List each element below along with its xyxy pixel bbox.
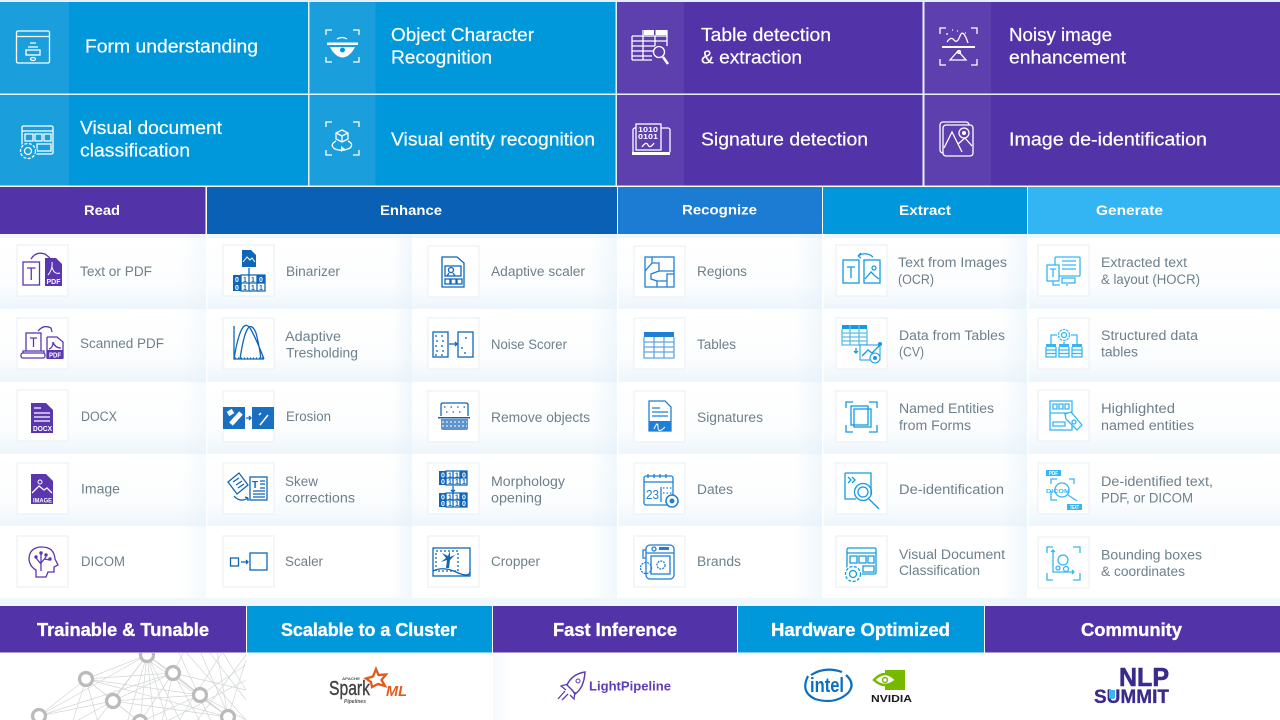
item: Cropper xyxy=(428,536,540,587)
logo: NVIDIA: NVIDIA xyxy=(871,694,912,705)
item: Bounding boxes and coordinates: Bounding boxes xyxy=(1101,548,1202,562)
icon: scanner to PDF xyxy=(17,318,68,369)
item: Adaptive Tresholding: Adaptive xyxy=(285,329,341,344)
item: Signatures xyxy=(634,391,763,442)
logo: NVIDIA xyxy=(871,670,912,705)
item: Remove objects: Remove objects xyxy=(491,410,590,425)
tile: Visual document classification xyxy=(0,95,308,186)
column: Enhance, second group xyxy=(428,246,590,587)
icon: binarizer grid: 1 xyxy=(259,285,263,292)
logo: NLP Summit: NLP xyxy=(1119,662,1169,692)
panel: Scalable to a Cluster xyxy=(247,606,492,705)
logo: Spark ML Pipelines xyxy=(329,669,407,705)
icon: signature tablet xyxy=(632,124,670,155)
icon: de-identified scan: TEXT xyxy=(1070,505,1079,511)
item: De-identification xyxy=(836,463,1004,514)
icon: signature tablet: 0101 xyxy=(638,134,658,141)
logo: LightPipeline xyxy=(558,672,671,700)
icon: de-identified scan: DICOM xyxy=(1046,489,1070,495)
heading: Community: Community xyxy=(1081,620,1182,640)
logo: Spark ML Pipelines: APACHE xyxy=(342,676,360,681)
item: Text or PDF: Text or PDF xyxy=(80,264,152,279)
item: Visual Document Classification xyxy=(836,536,1005,587)
icon: image file: IMAGE xyxy=(33,498,52,504)
item: De-identified text, PDF, or DICOM: De-identified text, xyxy=(1101,474,1213,489)
item: Cropper: Cropper xyxy=(491,554,540,569)
icon: morphology grids xyxy=(428,463,479,514)
icon: scanner to PDF: PDF xyxy=(49,352,62,360)
icon: noisy image xyxy=(940,28,977,65)
icon: morphology grids: 1 xyxy=(448,501,452,508)
item: Dates xyxy=(634,463,733,514)
logo: Intel xyxy=(805,670,852,701)
item: Skew corrections xyxy=(223,463,355,514)
item: Extracted text and layout (HOCR): & layout (HOCR) xyxy=(1101,272,1200,287)
icon: magnifier over document xyxy=(836,463,887,514)
item: Adaptive scaler: Adaptive scaler xyxy=(491,264,585,279)
item: Morphology opening: Morphology xyxy=(491,474,565,489)
item: Highlighted named entities xyxy=(1038,390,1194,441)
item: Text from Images (OCR) xyxy=(836,245,1007,296)
icon: table magnifier xyxy=(632,30,668,64)
panel: capability tiles xyxy=(0,0,1280,186)
item: Data from Tables (CV) xyxy=(836,318,1005,369)
item: Visual Document Classification: Classification xyxy=(899,563,980,578)
icon: binarizer grid: 0 xyxy=(259,277,263,284)
item: DICOM: DICOM xyxy=(81,554,125,569)
item: Scanned PDF: Scanned PDF xyxy=(80,336,164,351)
item: Data from Tables (CV): Data from Tables xyxy=(899,328,1005,343)
icon: morphology grids: 1 xyxy=(448,494,452,502)
tile: Form understanding: Form understanding xyxy=(85,36,258,56)
icon: histogram curves xyxy=(223,318,274,369)
icon: eye scan xyxy=(326,30,359,62)
item: Text from Images (OCR): Text from Images xyxy=(898,255,1007,270)
item: Named Entities from Forms: from Forms xyxy=(899,418,971,433)
item: De-identification: De-identification xyxy=(899,482,1004,497)
panel: table shading xyxy=(0,234,1280,606)
item: Binarizer xyxy=(223,245,340,296)
tile: Visual document classification: Visual document xyxy=(80,118,222,138)
item: Visual Document Classification: Visual Document xyxy=(899,547,1005,562)
column: Extract xyxy=(836,245,1007,587)
item: De-identified text, PDF, or DICOM xyxy=(1038,463,1213,514)
item: Brands: Brands xyxy=(697,554,741,569)
item: Bounding boxes and coordinates xyxy=(1038,537,1202,588)
icon: morphology grids: 1 xyxy=(462,479,466,486)
item: Named Entities from Forms xyxy=(836,391,994,442)
tile: Noisy image enhancement xyxy=(924,2,1280,94)
panel: Trainable and Tunable xyxy=(0,606,246,720)
icon: binarizer grid: 1 xyxy=(243,277,247,284)
icon: text to PDF: PDF xyxy=(46,279,61,286)
item: Extracted text and layout (HOCR) xyxy=(1038,245,1200,296)
heading: Scalable to a Cluster: Scalable to a Cluster xyxy=(281,620,457,640)
network graph xyxy=(30,653,246,720)
item: Text or PDF xyxy=(17,245,152,296)
tile: Image de-identification xyxy=(924,95,1280,186)
icon: de-identified scan xyxy=(1038,463,1089,514)
icon: signed document xyxy=(634,391,685,442)
item: DOCX xyxy=(17,390,117,441)
header: Generate xyxy=(1028,187,1280,234)
logo: LightPipeline: LightPipeline xyxy=(589,680,671,694)
item: Structured data tables xyxy=(1038,318,1199,369)
logo: NLP Summit xyxy=(1094,662,1169,708)
panel: Hardware Optimized xyxy=(738,606,984,705)
icon: bounding box axes xyxy=(1038,537,1089,588)
icon: image with eye xyxy=(940,122,973,156)
item: Remove objects xyxy=(428,391,590,442)
item: Named Entities from Forms: Named Entities xyxy=(899,401,994,416)
tile: Form understanding xyxy=(0,2,308,94)
icon: morphology grids: 1 xyxy=(455,494,459,502)
icon: morphology grids: 0 xyxy=(462,472,466,480)
item: Signatures: Signatures xyxy=(697,410,763,425)
icon: noise documents xyxy=(428,318,479,369)
icon: morphology grids: 1 xyxy=(455,472,459,480)
item: Image xyxy=(17,463,120,514)
icon: classification window xyxy=(836,536,887,587)
icon: morphology grids: 0 xyxy=(441,494,445,502)
icon: document classification xyxy=(19,126,53,160)
icon: binarizer grid: 1 xyxy=(243,285,247,292)
tile: Object Character Recognition: Recognition xyxy=(391,48,492,68)
icon: data from tables xyxy=(836,318,887,369)
header: Read: Read xyxy=(84,202,120,218)
tile: Object Character Recognition: Object Character xyxy=(391,25,534,45)
item: Noise Scorer: Noise Scorer xyxy=(491,337,567,352)
icon: morphology grids: 1 xyxy=(448,479,452,486)
icon: binarizer grid: 0 xyxy=(235,285,239,292)
item: Highlighted named entities: named entities xyxy=(1101,418,1194,433)
item: Adaptive Tresholding xyxy=(223,318,358,369)
header: Recognize xyxy=(618,187,822,234)
item: Image: Image xyxy=(81,482,120,496)
logo: Spark ML Pipelines: Spark xyxy=(329,678,371,700)
icon: table xyxy=(634,318,685,369)
item: Tables xyxy=(634,318,736,369)
heading: Trainable and Tunable: Trainable & Tunable xyxy=(37,620,209,640)
tile: Table detection and extraction: & extraction xyxy=(701,48,802,68)
tile: Signature detection xyxy=(617,95,922,186)
item: Text from Images (OCR): (OCR) xyxy=(898,272,934,287)
logo: Spark ML Pipelines: ML xyxy=(386,683,407,700)
item: Dates: Dates xyxy=(697,482,733,497)
item: Scanned PDF xyxy=(17,318,164,369)
icon: brand device xyxy=(634,536,685,587)
icon: form xyxy=(16,31,50,63)
item: Erosion xyxy=(223,391,331,442)
icon: binarizer grid xyxy=(223,245,274,296)
column: Recognize xyxy=(634,246,763,587)
item: Adaptive scaler xyxy=(428,246,585,297)
header: Read xyxy=(0,187,206,234)
icon: morphology grids: 0 xyxy=(462,494,466,502)
item: Adaptive Tresholding: Tresholding xyxy=(286,346,358,360)
column: Enhance, first group xyxy=(223,245,358,587)
item: Scaler xyxy=(223,536,324,587)
item: Structured data tables: tables xyxy=(1101,344,1138,360)
logo: Intel: intel xyxy=(810,675,844,697)
header: Generate: Generate xyxy=(1096,202,1163,218)
item: Morphology opening xyxy=(428,463,565,514)
panel: Fast Inference xyxy=(493,606,737,720)
icon: de-identified scan: PDF xyxy=(1049,471,1058,477)
item: Noise Scorer xyxy=(428,318,567,369)
item: Binarizer: Binarizer xyxy=(286,264,340,279)
column: Generate xyxy=(1038,245,1213,588)
icon: calendar: 23 xyxy=(646,487,659,502)
panel: Community xyxy=(985,606,1280,708)
tile: Signature detection: Signature detection xyxy=(701,130,868,150)
tile: Table detection and extraction: Table detection xyxy=(701,25,831,45)
item: Skew corrections: Skew xyxy=(285,474,318,489)
heading: Fast Inference: Fast Inference xyxy=(553,620,677,640)
icon: morphology grids: 1 xyxy=(455,501,459,508)
icon: binarizer grid: 1 xyxy=(251,285,255,292)
icon: cube scan xyxy=(326,122,359,155)
item: Highlighted named entities: Highlighted xyxy=(1101,401,1175,416)
item: Morphology opening: opening xyxy=(491,490,542,506)
icon: DOCX file: DOCX xyxy=(33,426,52,433)
header: Recognize: Recognize xyxy=(682,202,757,218)
tile: Visual document classification: classification xyxy=(80,140,190,160)
item: Regions xyxy=(634,246,747,297)
icon: binarizer grid: 1 xyxy=(251,277,255,284)
icon: morphology grids: 0 xyxy=(462,501,466,508)
item: Skew corrections: corrections xyxy=(285,490,355,506)
icon: scale squares xyxy=(223,536,274,587)
tile: Table detection and extraction xyxy=(617,2,922,94)
icon: noise removal xyxy=(428,391,479,442)
header: Enhance xyxy=(207,187,617,234)
icon: text and layout xyxy=(1038,245,1089,296)
icon: entity frame xyxy=(836,391,887,442)
item: Extracted text and layout (HOCR): Extracted text xyxy=(1101,255,1187,270)
item: De-identified text, PDF, or DICOM: PDF, or DICOM xyxy=(1101,490,1193,506)
panel: pipeline column headers xyxy=(0,187,1280,234)
icon: erosion squares xyxy=(223,391,274,442)
icon: regions map xyxy=(634,246,685,297)
tile: Visual entity recognition: Visual entity recognition xyxy=(391,130,595,150)
icon: morphology grids: 0 xyxy=(441,472,445,480)
item: Data from Tables (CV): (CV) xyxy=(899,344,924,360)
icon: text from image xyxy=(836,245,887,296)
icon: binarizer grid: 0 xyxy=(235,277,239,284)
icon: skew documents: T xyxy=(252,480,258,491)
icon: brain head xyxy=(17,536,68,587)
icon: crop palm xyxy=(428,536,479,587)
icon: signature tablet: 1010 xyxy=(638,127,658,134)
item: Scaler: Scaler xyxy=(285,554,324,569)
tile: Visual entity recognition xyxy=(310,95,616,186)
icon: gear and tables xyxy=(1038,318,1089,369)
item: Erosion: Erosion xyxy=(286,409,331,424)
item: Tables: Tables xyxy=(697,337,736,352)
heading: Hardware Optimized: Hardware Optimized xyxy=(771,620,950,640)
item: Regions: Regions xyxy=(697,264,747,279)
item: Brands xyxy=(634,536,741,587)
header: Extract xyxy=(823,187,1027,234)
item: DOCX: DOCX xyxy=(81,409,117,424)
item: Structured data tables: Structured data xyxy=(1101,328,1199,343)
tile: Noisy image enhancement: enhancement xyxy=(1009,48,1126,68)
column: Read xyxy=(17,245,164,587)
logo: NLP Summit: SUMMIT xyxy=(1094,687,1169,708)
icon: morphology grids: 1 xyxy=(455,479,459,486)
icon: morphology grids: 0 xyxy=(441,479,445,486)
icon: morphology grids: 0 xyxy=(441,501,445,508)
tile: Object Character Recognition xyxy=(310,2,616,94)
tile: Image de-identification: Image de-identification xyxy=(1009,130,1207,150)
header: Extract: Extract xyxy=(899,202,951,218)
item: Bounding boxes and coordinates: & coordinates xyxy=(1101,564,1185,579)
icon: morphology grids: 1 xyxy=(448,472,452,480)
tile: Noisy image enhancement: Noisy image xyxy=(1009,25,1112,45)
icon: highlighter on form xyxy=(1038,390,1089,441)
header: Enhance: Enhance xyxy=(380,202,442,218)
icon: adaptive scaler document xyxy=(428,246,479,297)
logo: Spark ML Pipelines: Pipelines xyxy=(344,699,366,705)
item: DICOM xyxy=(17,536,125,587)
